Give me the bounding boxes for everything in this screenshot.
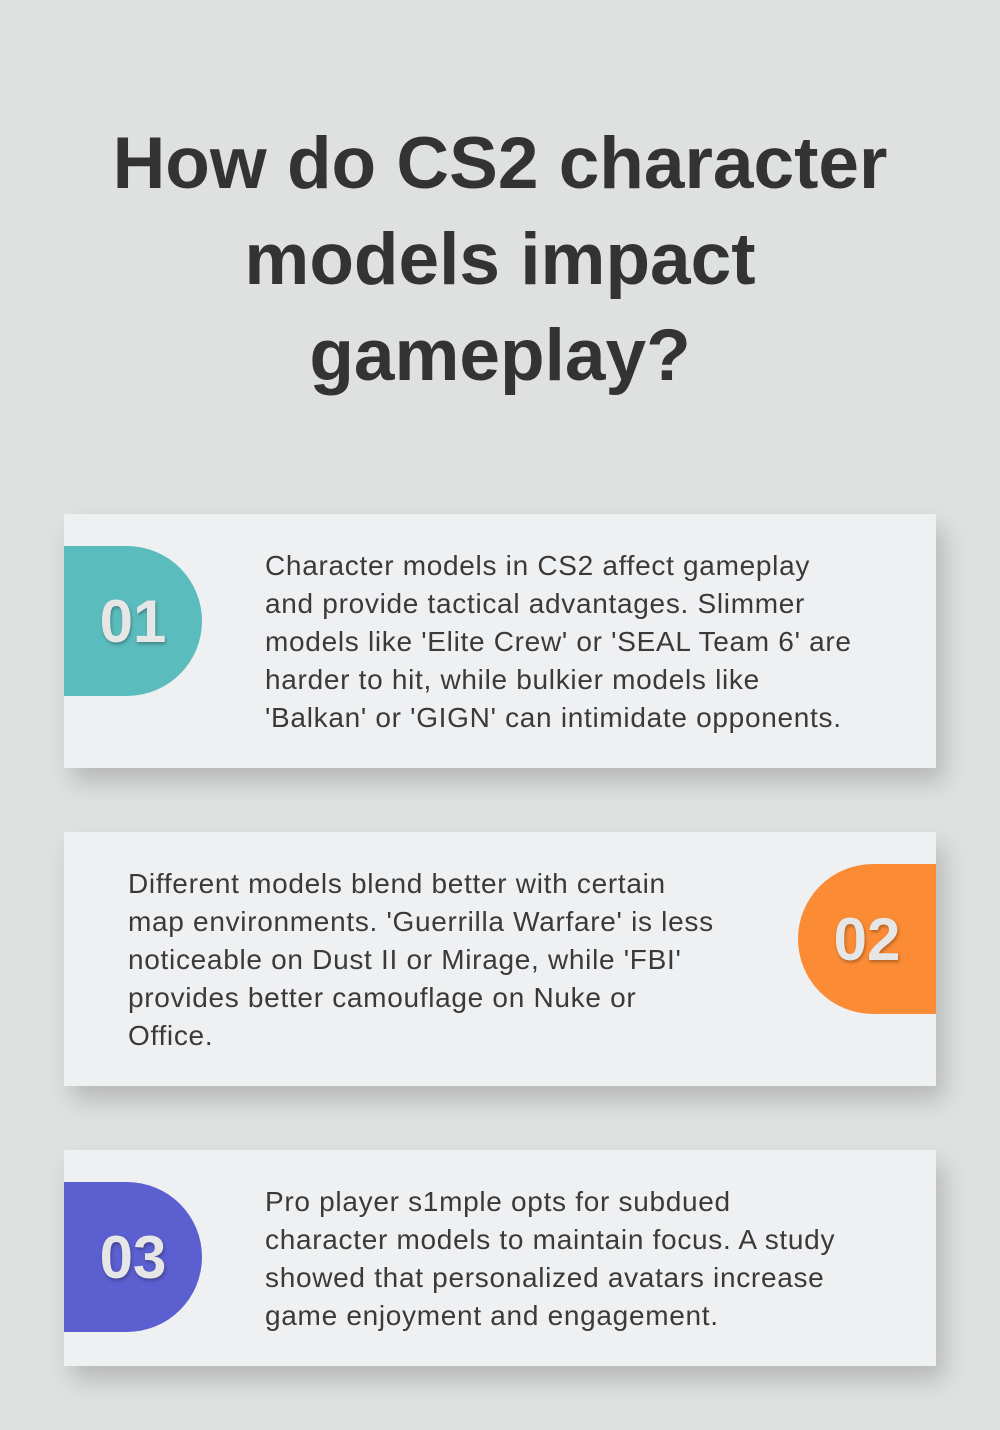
text 2: Office. [128,1020,213,1051]
badge 01 [64,546,202,696]
text 2: Different models blend better with certain [128,868,666,899]
text 3: Pro player s1mple opts for subdued [265,1186,731,1217]
badge 03: 03 [100,1224,166,1290]
text 3: game enjoyment and engagement. [265,1300,719,1331]
card 3 [64,1150,936,1366]
badge 01: 01 [100,588,166,654]
text 3: showed that personalized avatars increase [265,1262,824,1293]
badge 02 [798,864,936,1014]
text 1: harder to hit, while bulkier models like [265,664,760,695]
text 1: and provide tactical advantages. Slimmer [265,588,805,619]
text 1 [265,550,852,733]
text 1: Character models in CS2 affect gameplay [265,550,810,581]
text 2 [128,868,714,1051]
text 3 [265,1186,835,1331]
title: models impact [244,219,756,300]
text 1: models like 'Elite Crew' or 'SEAL Team 6' are [265,626,852,657]
title: How do CS2 character [113,123,887,204]
text 2: provides better camouflage on Nuke or [128,982,636,1013]
badge 03 [64,1182,202,1332]
card 1 [64,514,936,768]
text 2: noticeable on Dust II or Mirage, while 'FBI' [128,944,682,975]
text 2: map environments. 'Guerrilla Warfare' is less [128,906,714,937]
badge 02: 02 [834,906,900,972]
text 1: 'Balkan' or 'GIGN' can intimidate opponents. [265,702,842,733]
title: gameplay? [309,315,691,396]
title [113,123,887,396]
text 3: character models to maintain focus. A study [265,1224,835,1255]
card 2 [64,832,936,1086]
